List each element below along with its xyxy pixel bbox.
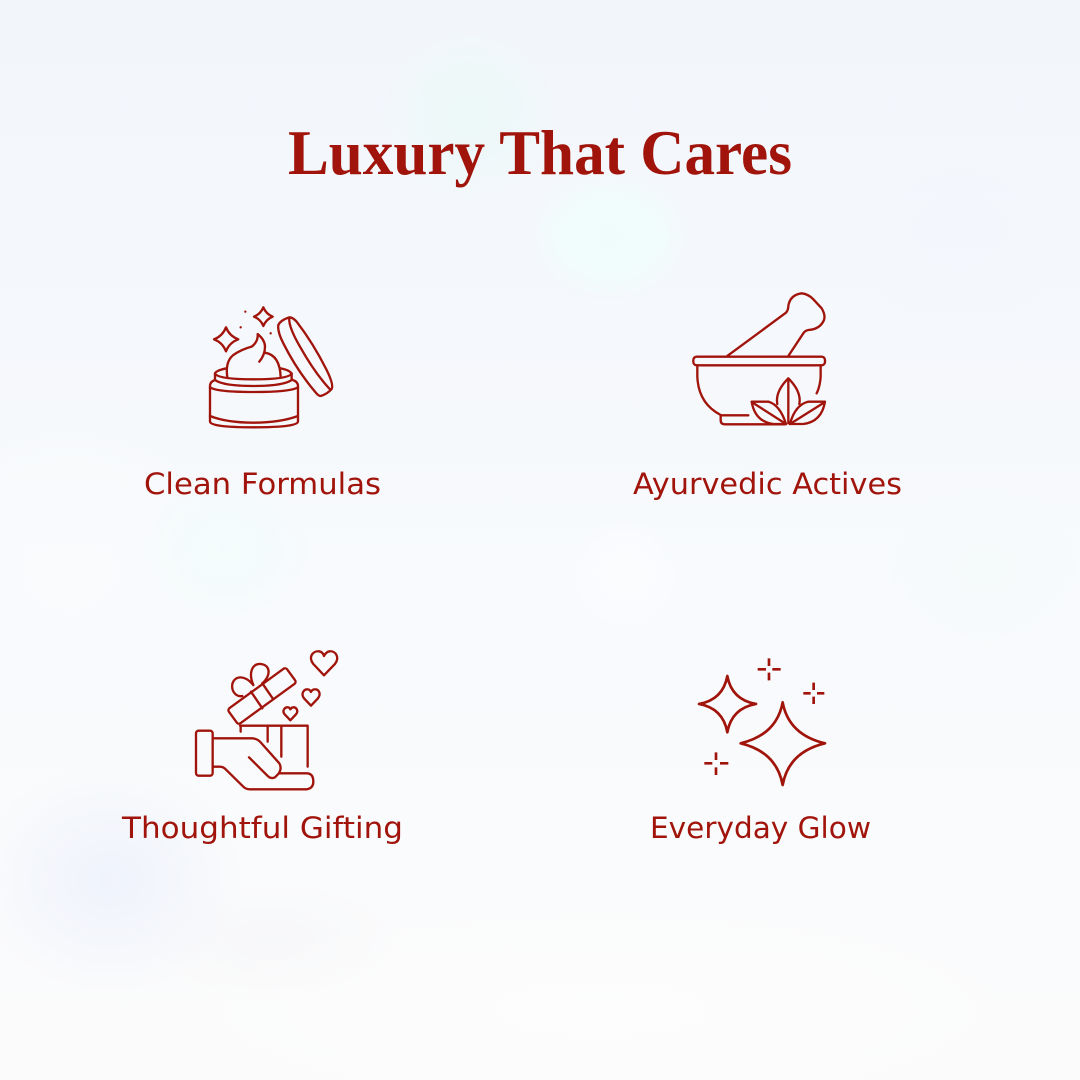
icon: hand holding open gift box with hearts (196, 651, 337, 789)
icon: cream jar with open lid and sparkles (210, 307, 332, 427)
icon: mortar and pestle with leaves (693, 293, 825, 424)
title: Luxury That Cares (288, 118, 792, 188)
label: Clean Formulas: Clean Formulas (144, 467, 381, 501)
label: Thoughtful Gifting: Thoughtful Gifting (121, 811, 403, 845)
label: Everyday Glow: Everyday Glow (650, 811, 871, 845)
label: Ayurvedic Actives: Ayurvedic Actives (633, 467, 902, 501)
icon: sparkles (699, 658, 825, 785)
